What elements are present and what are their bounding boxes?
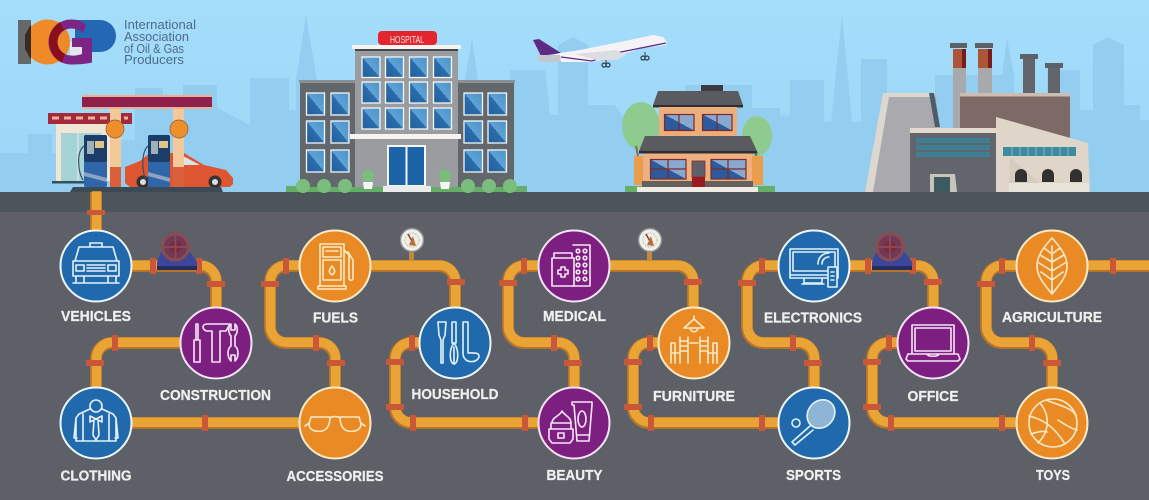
hospital sign [378,31,437,46]
gas station [48,95,233,192]
valve: right [872,234,912,270]
hospital sign: HOSPITAL [390,35,424,46]
icon: kitchen utensils [438,322,479,364]
label: ACCESSORIES [286,469,384,485]
label: TOYS [1036,468,1070,484]
node: household [412,308,498,403]
label: CLOTHING [60,468,132,484]
pipe flanges [86,210,1116,431]
panel: ground [0,192,1149,500]
icon: fuel pump [318,244,353,289]
pressure gauge: right [638,228,662,261]
node: medical [538,230,610,325]
logo text: Producers [124,52,185,67]
house door [692,161,705,187]
label: BEAUTY [546,468,603,484]
factory [865,43,1090,192]
house windows [650,114,746,179]
icon: tools [194,324,238,362]
fuel pumps [79,135,170,187]
factory arches [1015,169,1082,182]
icon: leaf [1037,238,1067,294]
icon: medicine bottle and pills [552,245,590,286]
label: AGRICULTURE [1002,310,1102,326]
chimneys [950,43,1063,130]
icon: glasses [305,416,365,431]
pipeline [96,191,1149,423]
label: HOUSEHOLD [412,387,498,403]
node: electronics [764,230,862,326]
valve: left [157,234,197,270]
IOGP logo [18,17,196,67]
factory window strip [1003,147,1076,156]
label: ELECTRONICS [764,310,862,326]
hospital windows [306,57,506,172]
node: beauty [538,388,610,484]
icon: television and remote [790,249,838,287]
label: SPORTS [786,468,841,484]
label: MEDICAL [543,309,606,325]
panel: sky background [0,0,1149,193]
factory teal panel [916,138,990,157]
node: furniture [653,308,735,405]
label: VEHICLES [61,309,131,325]
label: CONSTRUCTION [160,388,271,404]
icon: basketball [1029,399,1077,447]
house [622,85,775,192]
canopy [82,95,212,109]
label: FURNITURE [653,389,735,405]
city skyline silhouette [0,15,1149,192]
icon: tennis racket [792,394,841,445]
node: construction [160,308,271,404]
logo text: Association [124,29,189,44]
node: vehicles [60,230,132,325]
airplane [533,35,667,67]
logo text: International [124,17,196,32]
car [125,153,233,188]
icon: car [73,243,119,283]
label: OFFICE [908,389,959,405]
icon: table and chairs [671,316,717,363]
node: sports [778,388,850,484]
logo text: of Oil & Gas [124,41,184,56]
hospital shrubs and plants [296,170,517,193]
node: fuels [300,230,370,326]
node: office [898,308,968,405]
node: agriculture [1002,230,1102,326]
icon: laptop [906,325,960,361]
pressure gauge: left [400,228,424,261]
hospital door [383,145,431,192]
factory door [930,174,957,192]
label: FUELS [313,310,358,326]
node: toys [1016,388,1088,484]
hospital [286,31,527,193]
logo text [124,17,196,67]
icon: cosmetics [549,402,592,443]
node: accessories [286,388,384,485]
node: clothing [60,388,132,484]
trees [622,102,772,158]
icon: suit [74,400,118,441]
